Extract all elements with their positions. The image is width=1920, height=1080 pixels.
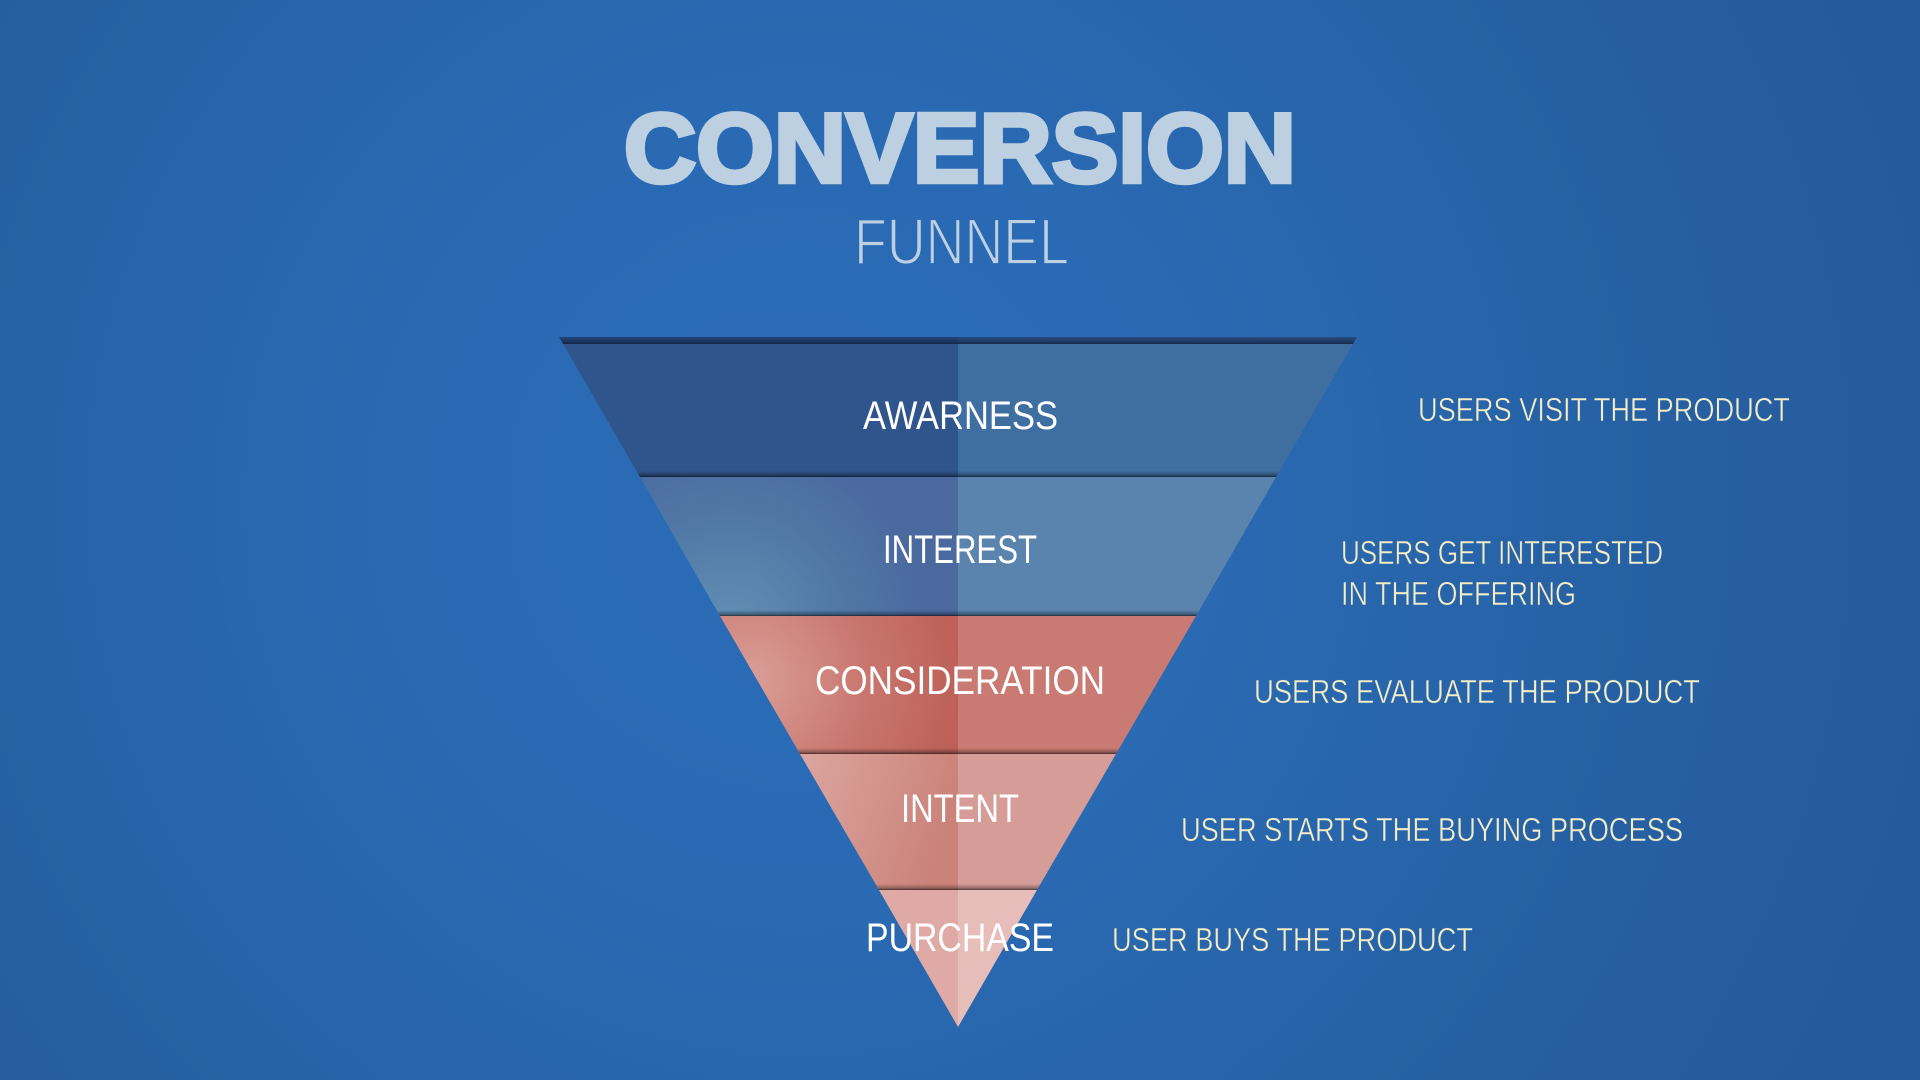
funnel band: purchase — [879, 890, 1037, 1027]
funnel band: consideration — [720, 616, 1196, 754]
subtitle: FUNNEL — [854, 205, 1069, 278]
label: purchase: PURCHASE — [866, 916, 1054, 960]
description: interest: USERS GET INTERESTED — [1341, 534, 1663, 571]
funnel band: interest — [640, 477, 1276, 616]
funnel band: awareness — [559, 337, 1357, 477]
funnel chart — [559, 337, 1357, 1027]
description: purchase: USER BUYS THE PRODUCT — [1112, 921, 1473, 958]
description: consideration: USERS EVALUATE THE PRODUCT — [1254, 673, 1700, 710]
title: CONVERSION — [624, 93, 1296, 203]
description: intent: USER STARTS THE BUYING PROCESS — [1181, 811, 1683, 848]
description: interest: IN THE OFFERING — [1341, 575, 1576, 612]
funnel band: intent — [800, 754, 1116, 890]
description: awareness: USERS VISIT THE PRODUCT — [1418, 391, 1790, 428]
label: consideration: CONSIDERATION — [815, 659, 1105, 703]
label: interest: INTEREST — [883, 528, 1037, 572]
label: intent: INTENT — [901, 787, 1019, 831]
description: interest — [1341, 534, 1663, 612]
label: awarness: AWARNESS — [863, 394, 1058, 438]
